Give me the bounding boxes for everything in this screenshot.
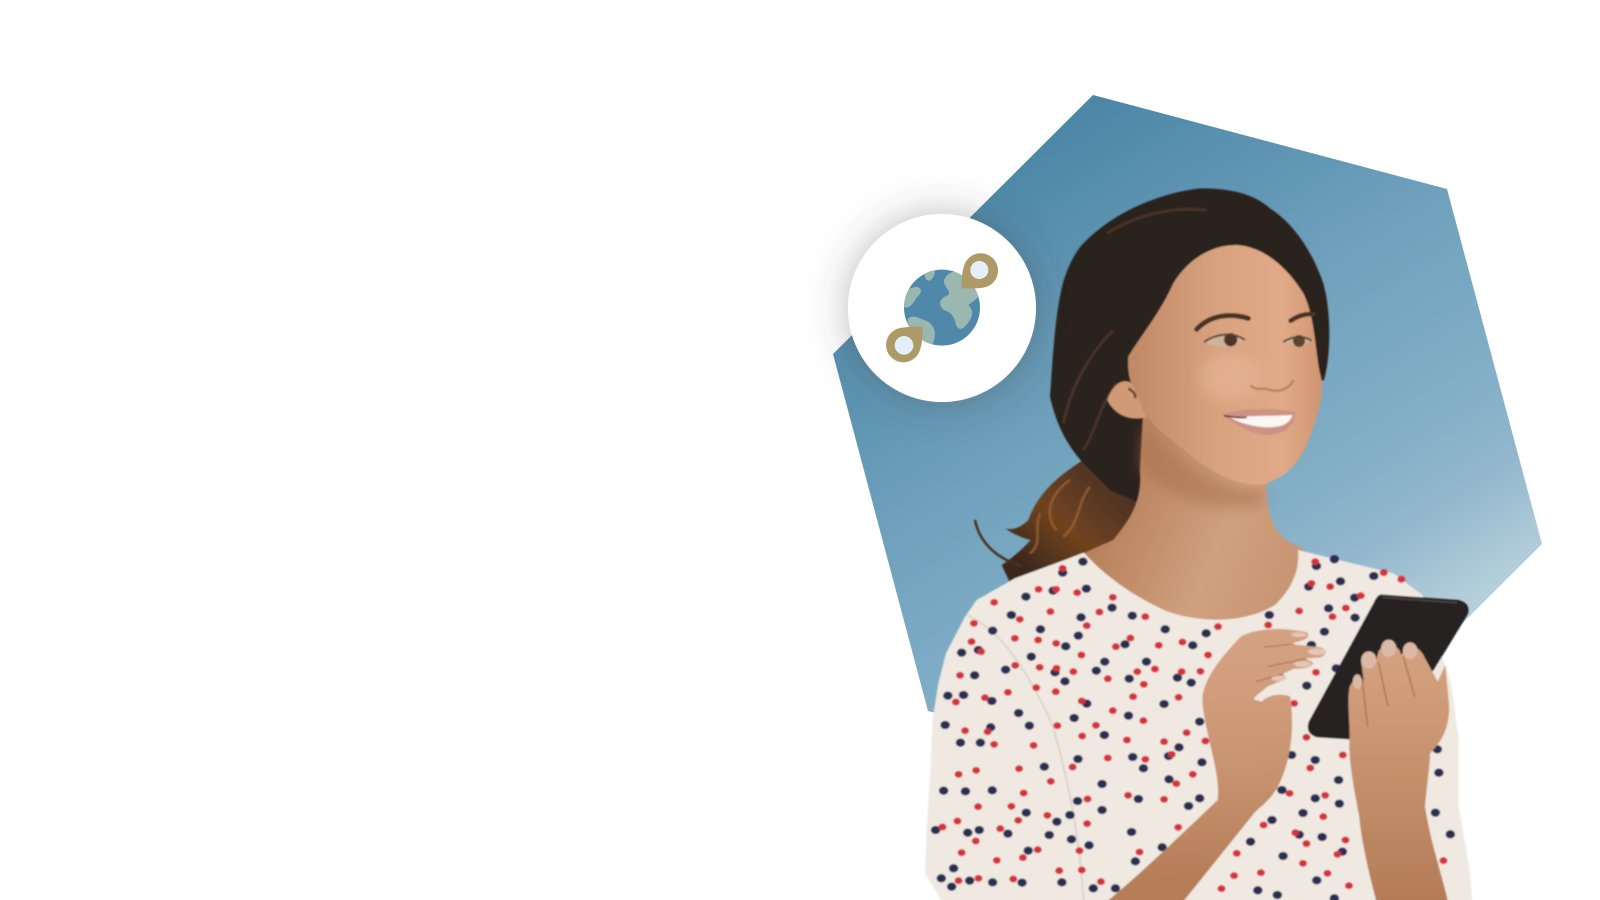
dark hair xyxy=(1050,188,1329,503)
phone top edge highlight xyxy=(1382,597,1457,603)
globe xyxy=(904,270,980,346)
ponytail xyxy=(1002,460,1143,590)
pin centre: bottom left xyxy=(895,336,913,355)
fingernails xyxy=(1271,632,1326,681)
pin: top right xyxy=(962,253,998,288)
eyes xyxy=(1204,335,1245,346)
holding hand and forearm xyxy=(1348,644,1449,900)
face xyxy=(1128,245,1322,485)
writing hand and forearm xyxy=(1107,629,1326,900)
blue hexagon background xyxy=(833,95,1542,804)
eyebrows xyxy=(1197,315,1248,329)
sleeve seam xyxy=(967,615,1084,900)
ponytail curls xyxy=(1030,480,1090,553)
hero illustration xyxy=(828,95,1542,900)
finger creases xyxy=(1256,644,1306,682)
ear xyxy=(1107,381,1147,418)
navy polka dots xyxy=(931,555,1455,900)
shadow under the jaw xyxy=(1140,423,1267,508)
fingertips xyxy=(1353,640,1417,689)
hair and head xyxy=(1002,188,1333,637)
icon: globe with location pins xyxy=(886,253,998,362)
red polka dots xyxy=(938,558,1447,892)
smile line xyxy=(1224,416,1247,418)
mouth xyxy=(1223,409,1296,435)
blouse xyxy=(925,550,1472,900)
ear shadow xyxy=(1128,388,1135,398)
pin: bottom left xyxy=(886,327,923,362)
cheek glow xyxy=(1200,353,1260,400)
smartphone xyxy=(1308,594,1469,740)
woman with phone xyxy=(925,188,1472,900)
nose xyxy=(1251,380,1293,391)
finger separations xyxy=(1362,657,1415,727)
wisp of hair xyxy=(975,520,1022,566)
hair strands xyxy=(1063,209,1207,450)
globe badge xyxy=(848,214,1036,402)
neck xyxy=(1083,410,1333,637)
pin centre: top right xyxy=(970,261,988,279)
torso xyxy=(925,550,1472,900)
white circle xyxy=(848,214,1036,402)
continents xyxy=(902,270,979,347)
